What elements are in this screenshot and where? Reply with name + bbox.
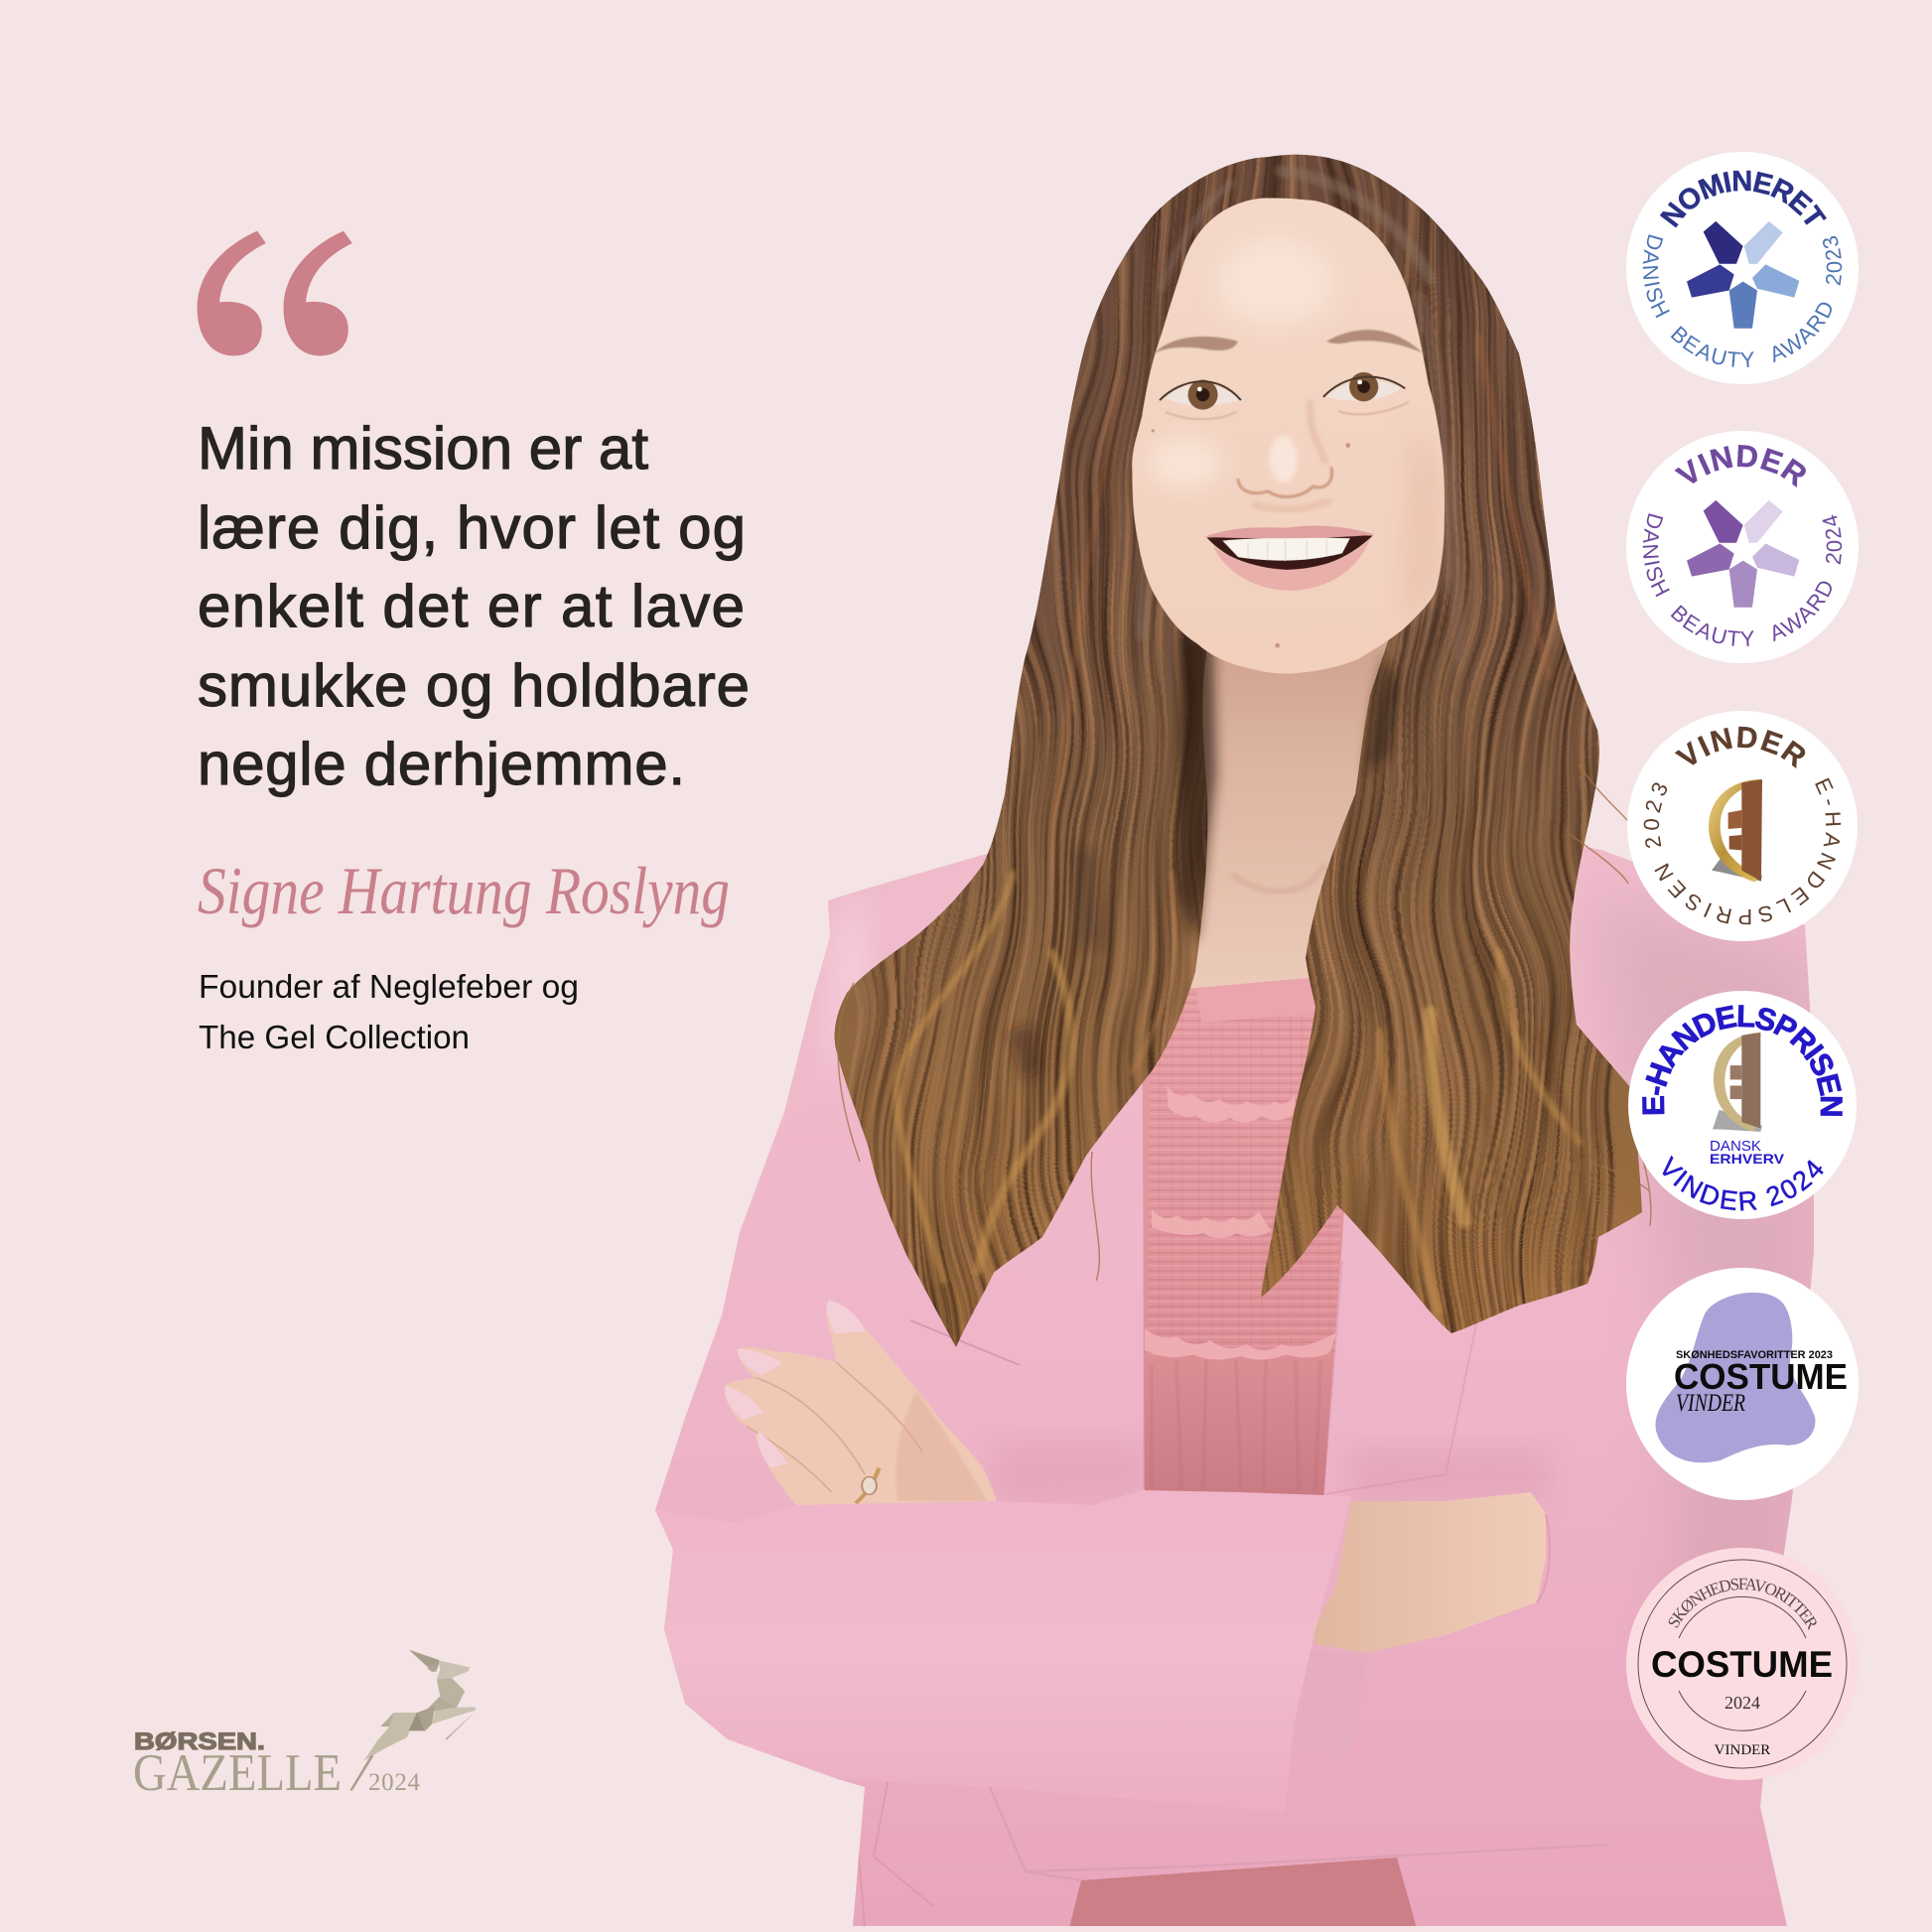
badge: Danish Beauty Award nomineret 2023 (1626, 152, 1859, 384)
lower blouse (1068, 1858, 1418, 1932)
right hand (1314, 1492, 1546, 1653)
badge: E-handelsprisen vinder 2024: DANSK (1710, 1138, 1761, 1155)
badge: E-handelsprisen vinder 2024 (1628, 991, 1857, 1219)
badge: Danish Beauty Award nomineret 2023: DANISH BEAUTY AWARD 2023 (1642, 234, 1843, 367)
badge: Danish Beauty Award vinder 2024 (1626, 431, 1859, 663)
ring (856, 1468, 879, 1503)
flyaway hairs (838, 764, 1651, 1281)
icon: lilac blob (1656, 1293, 1815, 1462)
quote text: negle derhjemme. (198, 731, 685, 797)
jacket fold lines (990, 1514, 1608, 1880)
neck creases (1231, 864, 1325, 892)
founder caption: Founder af Neglefeber og (199, 968, 579, 1005)
hair (834, 155, 1651, 1347)
right eye (1323, 372, 1409, 414)
badge: Costume skønhedsfavoritter 2023: SKØNHEDSFAVORITTER 2023 (1676, 1349, 1833, 1361)
badge: Costume skønhedsfavoritter 2024: VINDER (1715, 1742, 1770, 1758)
badge: Danish Beauty Award vinder 2024: VINDER (1674, 445, 1806, 487)
quote text: Min mission er at (198, 415, 648, 482)
icon: blue star (1687, 221, 1799, 329)
left hand (725, 1301, 999, 1508)
logo: Børsen Gazelle 2024: 2024 (368, 1769, 421, 1796)
hair dark shadows (1008, 635, 1400, 1082)
quote text (198, 415, 750, 797)
icon: purple star (1687, 500, 1799, 608)
head (1132, 198, 1445, 674)
blouse frills (1167, 1085, 1296, 1123)
badge: E-handelsprisen vinder 2024: ERHVERV (1710, 1151, 1785, 1167)
badge: Costume skønhedsfavoritter 2024: SKØNHEDSFAVORITTER (1668, 1579, 1817, 1630)
badge: Costume skønhedsfavoritter 2024 (1626, 1548, 1859, 1780)
icon: trophy gold (1709, 779, 1762, 883)
badge: E-handelsprisen vinder 2023 (1627, 711, 1858, 941)
founder caption: The Gel Collection (199, 1019, 470, 1055)
logo: Børsen Gazelle 2024: GAZELLE (133, 1744, 342, 1802)
badge: E-handelsprisen vinder 2024: VINDER 2024 (1662, 1156, 1824, 1211)
badge: Costume skønhedsfavoritter 2023 (1626, 1268, 1859, 1500)
icon: trophy silver (1713, 1033, 1762, 1132)
signature: Signe Hartung Roslyng (198, 853, 730, 928)
badge: E-handelsprisen vinder 2024: E-HANDELSPRISEN (1642, 1005, 1843, 1116)
badge: Costume skønhedsfavoritter 2024: COSTUME (1651, 1644, 1833, 1685)
icon: origami gazelle (349, 1650, 476, 1790)
logo: Børsen Gazelle 2024: BØRSEN. (134, 1728, 265, 1755)
blazer shading (824, 890, 1817, 1926)
face marks (1152, 429, 1350, 648)
left eye (1160, 379, 1241, 419)
badge: Costume skønhedsfavoritter 2023: VINDER (1676, 1390, 1745, 1417)
logo: Børsen Gazelle 2024 (133, 1650, 476, 1802)
badge: Danish Beauty Award nomineret 2023: NOMINERET (1660, 171, 1827, 228)
face (1132, 198, 1445, 674)
forearm sleeve (655, 1490, 1351, 1812)
founder caption (199, 968, 579, 1055)
badge: Danish Beauty Award vinder 2024: DANISH BEAUTY AWARD 2024 (1642, 513, 1843, 646)
quote text: lære dig, hvor let og (198, 494, 746, 561)
quote text: smukke og holdbare (198, 652, 750, 719)
brows (1154, 330, 1423, 353)
badge: E-handelsprisen vinder 2023: VINDER (1674, 727, 1805, 768)
hair strands (897, 171, 1588, 1311)
badge: Costume skønhedsfavoritter 2023: COSTUME (1674, 1356, 1848, 1397)
nose (1238, 400, 1332, 509)
blazer (655, 794, 1814, 1926)
blouse (1142, 978, 1344, 1495)
gap under wrist (1294, 1648, 1368, 1762)
quote mark icon (198, 231, 352, 355)
neck and chest (1190, 639, 1388, 988)
badge: Costume skønhedsfavoritter 2024: 2024 (1725, 1693, 1760, 1713)
mouth (1205, 526, 1374, 591)
quote text: enkelt det er at lave (198, 573, 745, 639)
nails (725, 1301, 865, 1468)
badge: E-handelsprisen vinder 2023: E-HANDELSPRISEN 2023 (1644, 778, 1841, 925)
cheek and forehead light (1216, 239, 1334, 326)
portrait photo (655, 155, 1817, 1932)
